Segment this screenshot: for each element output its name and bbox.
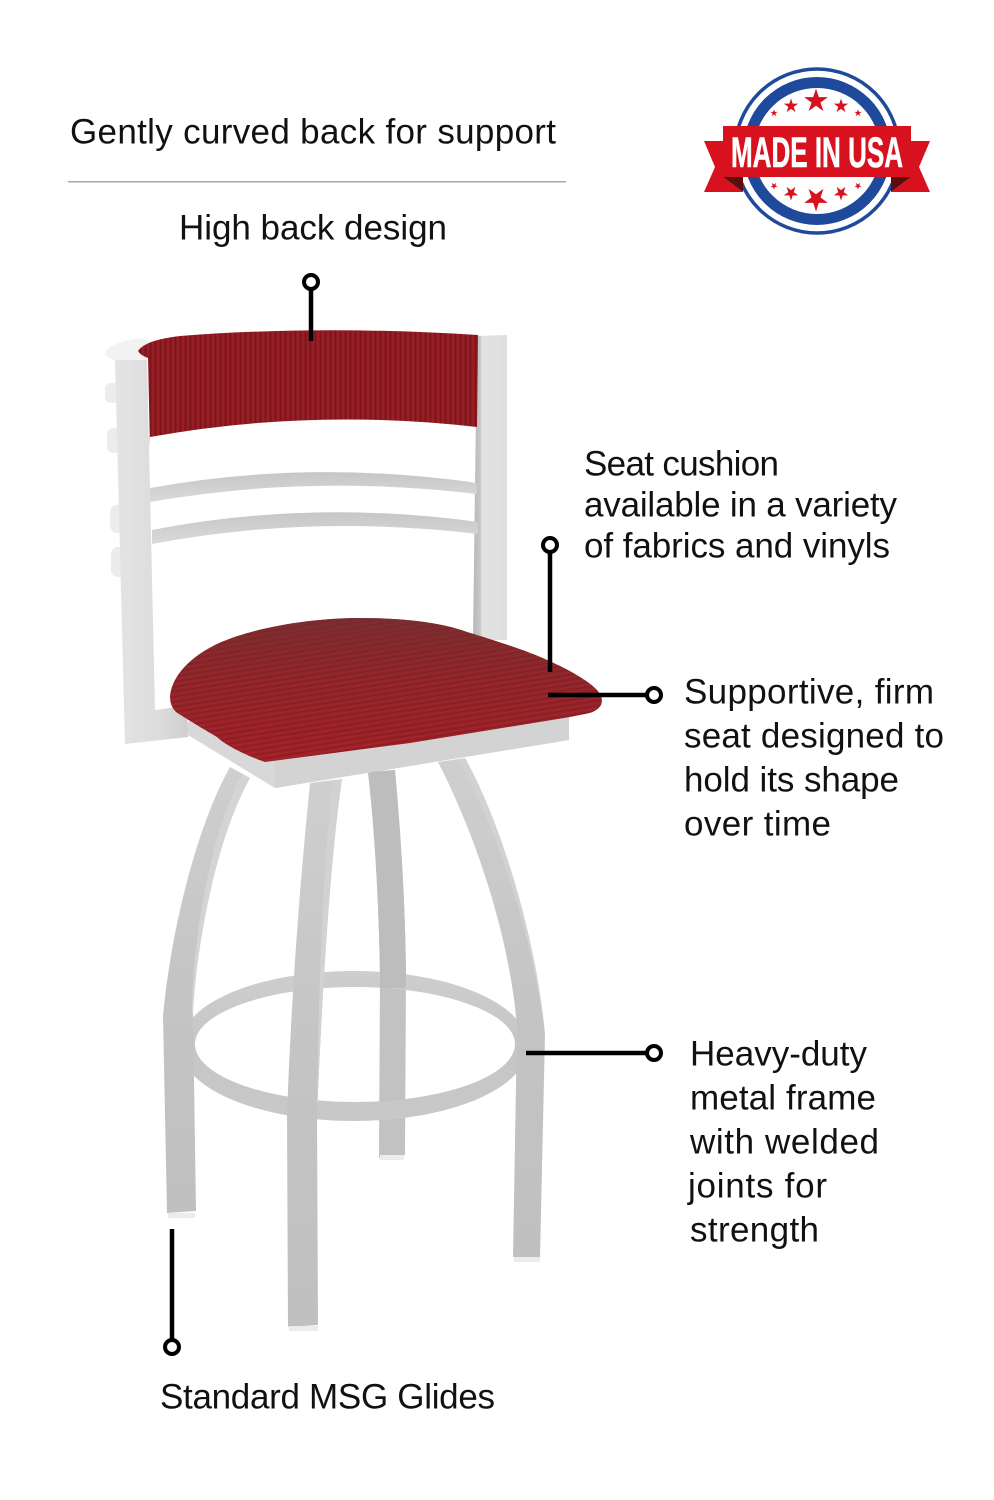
callout: glides [165,1229,179,1354]
stool illustration [105,330,602,1331]
back cushion [138,330,478,448]
label: firm seat: hold its shape [684,760,899,800]
glide back [380,1155,404,1160]
right post [473,335,507,640]
label: metal frame: strength [690,1210,819,1250]
glides [168,1213,540,1331]
heading: gently curved back: Gently curved back for support [70,112,556,152]
label: glides: Standard MSG Glides [160,1378,495,1416]
label: metal frame: joints for [687,1166,827,1206]
badge: made in USA [704,69,930,233]
label: seat cushion: available in a variety [584,486,898,524]
seat base plate [187,700,569,788]
back frame [105,330,507,744]
upper slat [150,472,477,502]
callout: high back [304,275,318,341]
label: firm seat: Supportive, firm [684,672,934,712]
leg right [438,758,545,1257]
callout: seat cushion [543,538,557,672]
label: seat cushion: Seat cushion [584,444,779,484]
label: firm seat [684,672,944,844]
badge stars [770,88,862,212]
callout: firm seat [548,688,661,702]
label: metal frame [687,1034,879,1250]
label: seat cushion [584,444,898,566]
label: metal frame: metal frame [690,1078,876,1118]
left post [115,358,188,744]
callout: metal frame [526,1046,661,1060]
lower slat [152,512,478,544]
back leg upper overlap [368,770,406,988]
back leg [368,770,406,1158]
ribbon [704,126,930,192]
label: seat cushion: of fabrics and vinyls [584,526,890,566]
badge rings [735,69,899,233]
back bolts [105,383,127,577]
label: firm seat: seat designed to [684,716,944,756]
label: metal frame: Heavy-duty [690,1034,868,1074]
label: firm seat: over time [684,804,831,844]
heading: high back design: High back design [179,208,447,248]
label: metal frame: with welded [689,1122,879,1162]
seat cushion [170,618,602,762]
leg front left [163,767,250,1213]
leg front centre [287,779,342,1327]
footrest ring [180,971,528,1121]
top rail cap [105,338,160,360]
